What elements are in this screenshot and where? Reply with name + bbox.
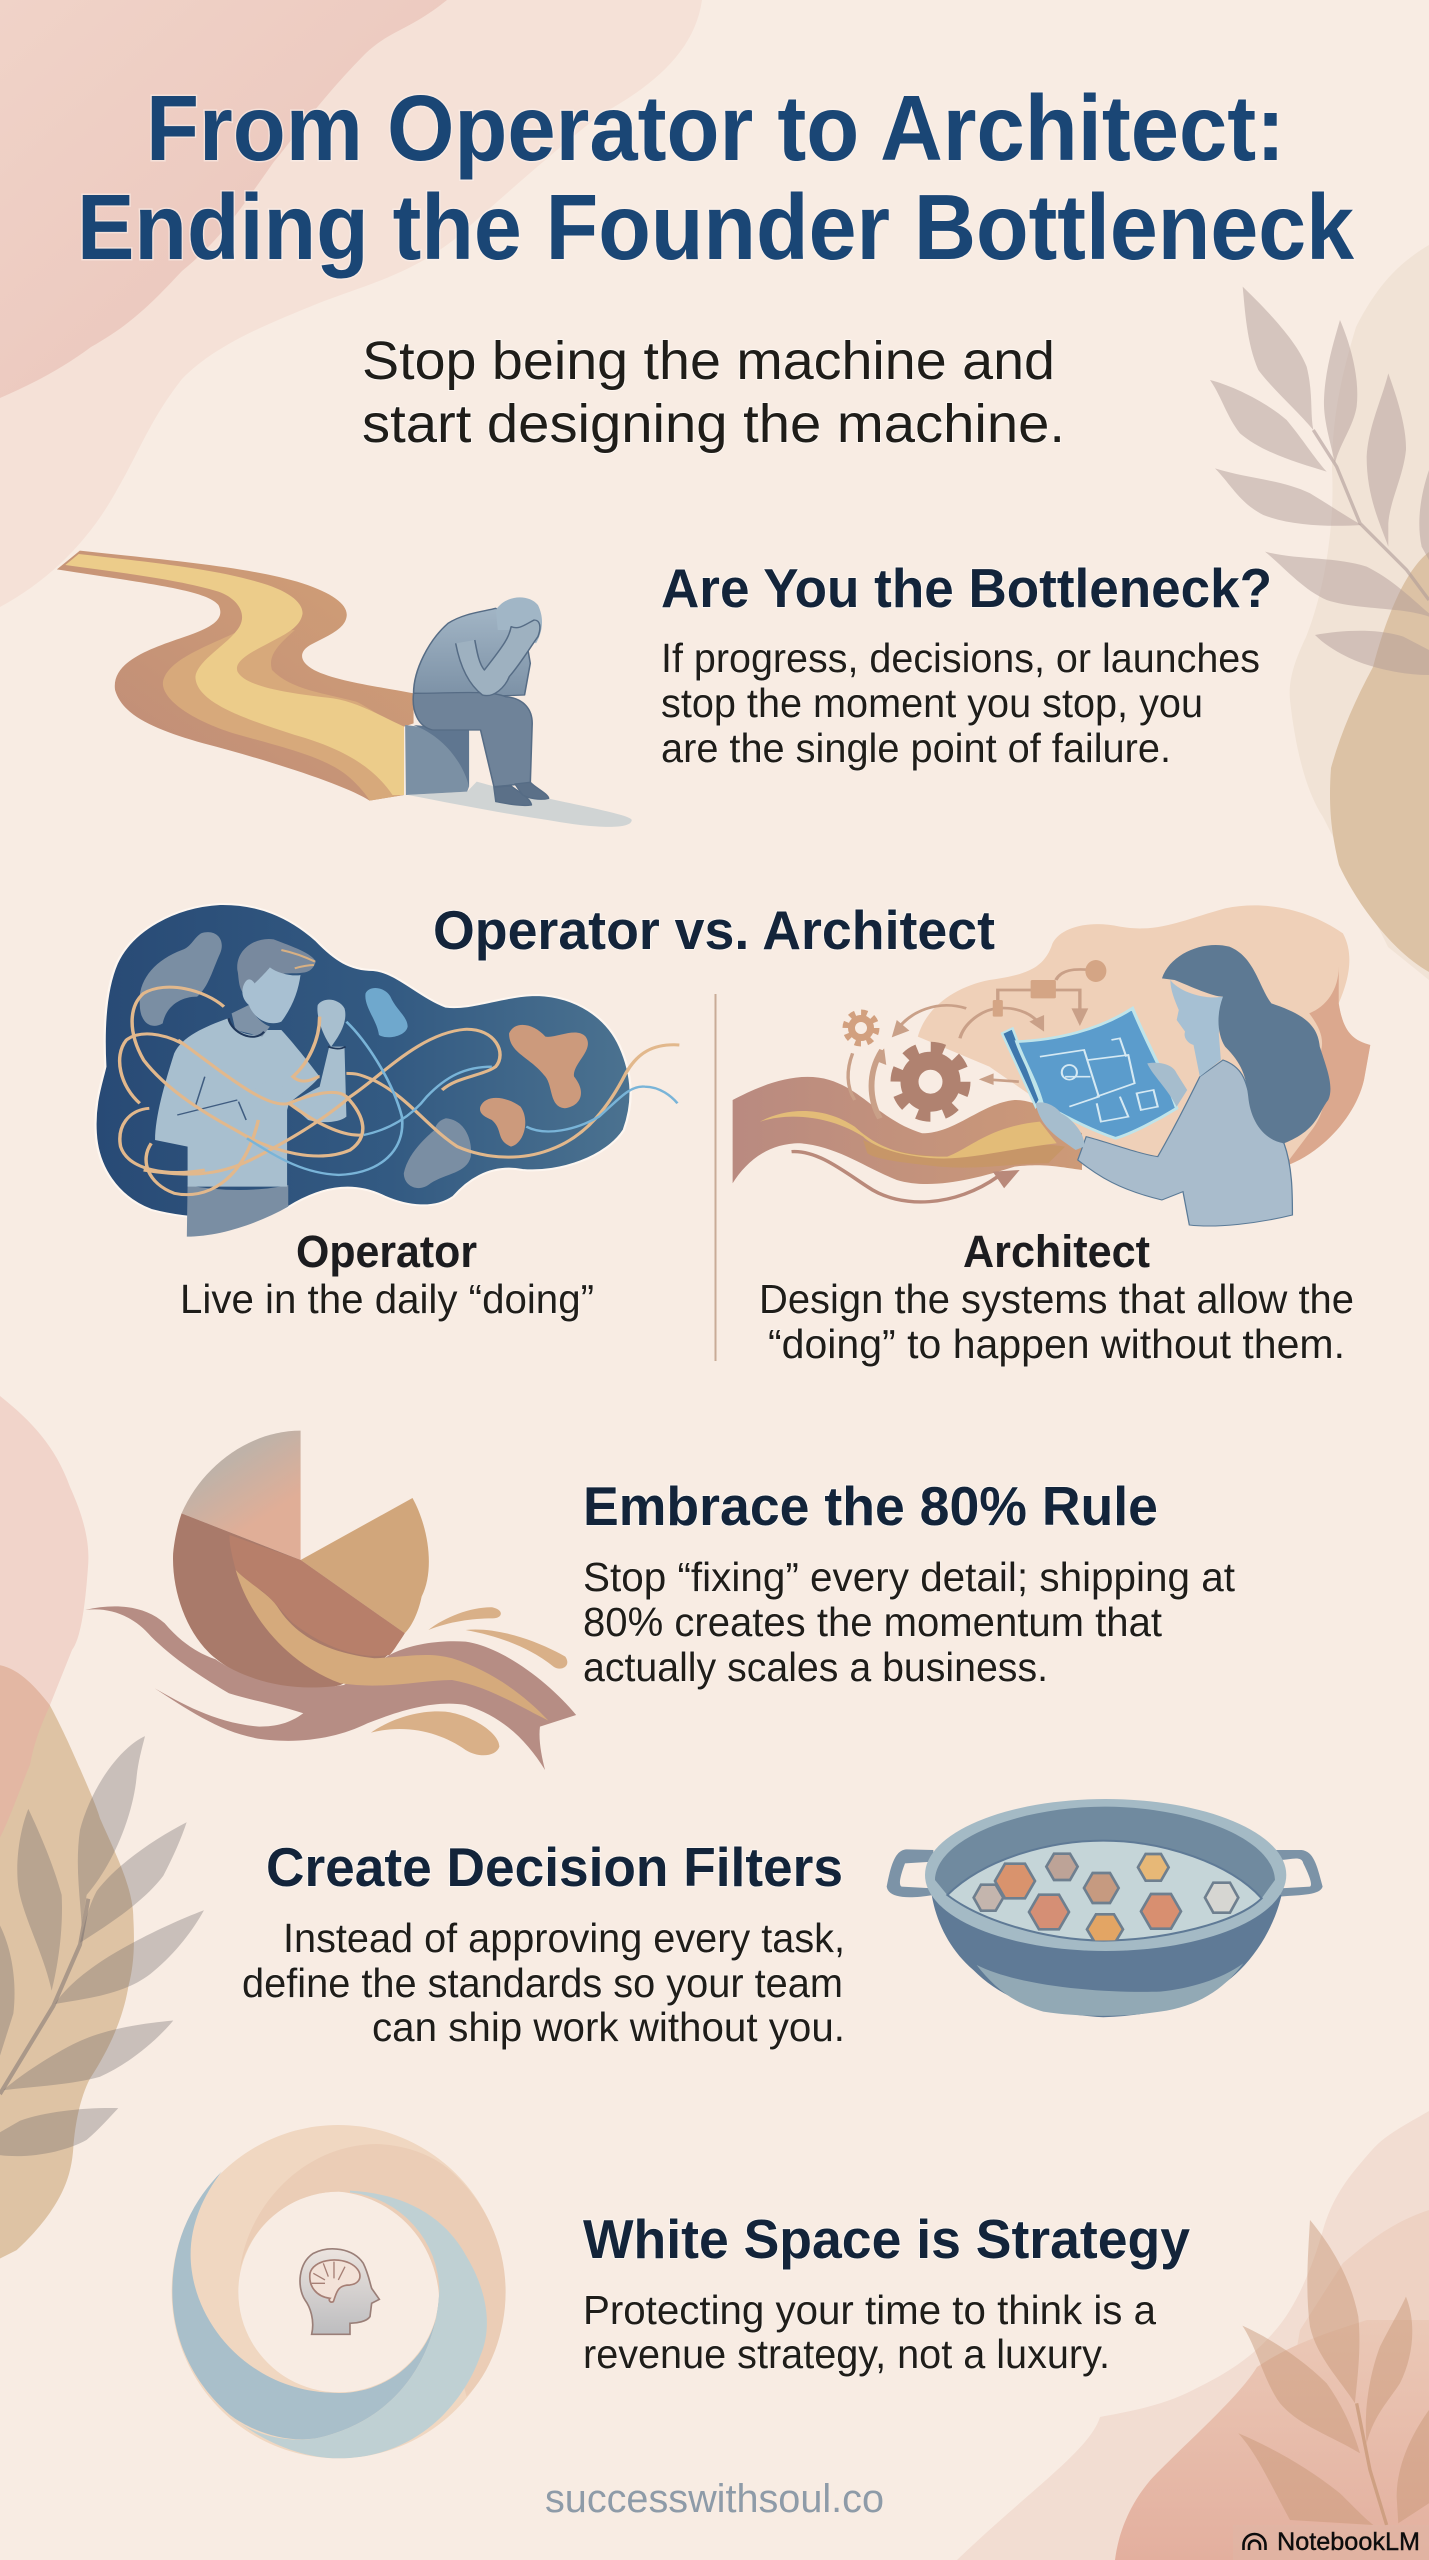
missing slice: [182, 1431, 301, 1560]
subtitle: [362, 331, 1065, 454]
tan wedge: [301, 1498, 429, 1633]
leaves: upper right branch: [1210, 287, 1429, 675]
bowl: [925, 1799, 1286, 2017]
woman's body: [1078, 945, 1330, 1226]
title: From Operator to Architect:: [146, 76, 1285, 180]
dark blob: [95, 904, 631, 1218]
section text: decision filters: Create Decision Filters: [266, 1836, 843, 1898]
icon: small gear: [846, 1012, 876, 1044]
illustration: path ending at seated founder: [57, 551, 632, 827]
section text: 80 percent rule: actually scales a business.: [583, 1644, 1048, 1690]
architect caption: Design the systems that allow the: [759, 1276, 1354, 1322]
section text: are you the bottleneck: stop the moment you stop, you: [661, 680, 1203, 726]
illustration: operator tangled in threads: [95, 904, 679, 1237]
tan swoosh: [236, 1570, 548, 1721]
watercolor: right side: [1290, 245, 1429, 980]
section text: 80 percent rule: Stop “fixing” every detail; shipping at: [583, 1554, 1236, 1600]
mid wedge: [229, 1535, 405, 1656]
section text: white space: Protecting your time to think is a: [583, 2287, 1156, 2333]
leaves: lower left branch: [0, 1736, 204, 2156]
illustration: 80 percent pie with ribbon: [85, 1431, 576, 1770]
notebooklm badge: [1233, 2525, 1429, 2560]
section text: white space: revenue strategy, not a luxury.: [583, 2331, 1110, 2377]
title: Ending the Founder Bottleneck: [77, 175, 1354, 279]
brown wedge: [173, 1513, 405, 1689]
leaves: bottom right branch: [1238, 2220, 1429, 2525]
section text: 80 percent rule: 80% creates the momentum that: [583, 1599, 1163, 1645]
section text: decision filters: define the standards so your team: [242, 1960, 843, 2006]
architect caption: Architect: [963, 1226, 1150, 1277]
section text: 80 percent rule: [583, 1475, 1236, 1690]
peach blob: [918, 905, 1370, 1167]
illustration: filter pot with hexagons: [887, 1799, 1323, 2017]
operator caption: Operator: [296, 1226, 477, 1277]
peach ring: [172, 2125, 505, 2458]
footer: website: successwithsoul.co: [545, 2477, 884, 2521]
section text: white space: [583, 2208, 1190, 2377]
splashes: [371, 1607, 567, 1755]
stone block: [405, 725, 469, 795]
tangled threads: [120, 987, 679, 1195]
section text: 80 percent rule: Embrace the 80% Rule: [583, 1475, 1158, 1537]
operator caption: Live in the daily “doing”: [180, 1276, 594, 1322]
dark blue crescent: [172, 2172, 439, 2439]
subtitle: start designing the machine.: [362, 394, 1065, 454]
heading: operator vs architect: Operator vs. Architect: [433, 899, 995, 961]
flowing wave: [733, 1077, 1082, 1184]
illustration: architect with blueprint: [733, 905, 1370, 1226]
handles: [887, 1849, 1323, 1897]
divider: [714, 994, 716, 1361]
notebooklm badge: NotebookLM: [1277, 2528, 1420, 2556]
icon: head with brain: [300, 2249, 379, 2334]
watercolor: top left: [0, 0, 702, 607]
section text: are you the bottleneck: Are You the Bottleneck?: [661, 557, 1272, 619]
icon: large gear: [896, 1048, 964, 1116]
light blue crescent: [232, 2191, 487, 2458]
seated figure: [413, 597, 549, 805]
watercolor: left pink blob: [0, 1396, 88, 1760]
pink ribbon: [85, 1606, 576, 1770]
floating shapes: [140, 932, 588, 1188]
section text: are you the bottleneck: If progress, decisions, or launches: [661, 635, 1260, 681]
section text: decision filters: Instead of approving every task,: [283, 1915, 845, 1961]
floor shadow: [408, 782, 632, 827]
section text: decision filters: can ship work without you.: [372, 2004, 845, 2050]
section text: white space: White Space is Strategy: [583, 2208, 1190, 2270]
architect caption: “doing” to happen without them.: [768, 1321, 1345, 1367]
winding path: [57, 551, 414, 801]
watercolor: left tan blob: [0, 1665, 134, 2258]
operator caption: [180, 1226, 594, 1322]
hexagons: [974, 1854, 1238, 1944]
section text: are you the bottleneck: [661, 557, 1272, 771]
woman's hands: [1036, 1063, 1187, 1150]
flow arrows and nodes: [792, 969, 1090, 1202]
architect caption: [759, 1226, 1354, 1367]
deeper peach: [240, 2144, 506, 2397]
title: [77, 76, 1354, 279]
section text: are you the bottleneck: are the single point of failure.: [661, 725, 1171, 771]
illustration: white space ring with head: [172, 2125, 506, 2458]
man: [155, 939, 346, 1237]
section text: decision filters: [242, 1836, 845, 2050]
blueprint: [1002, 1008, 1177, 1138]
watercolor: bottom right: [957, 2111, 1429, 2560]
subtitle: Stop being the machine and: [362, 331, 1055, 391]
